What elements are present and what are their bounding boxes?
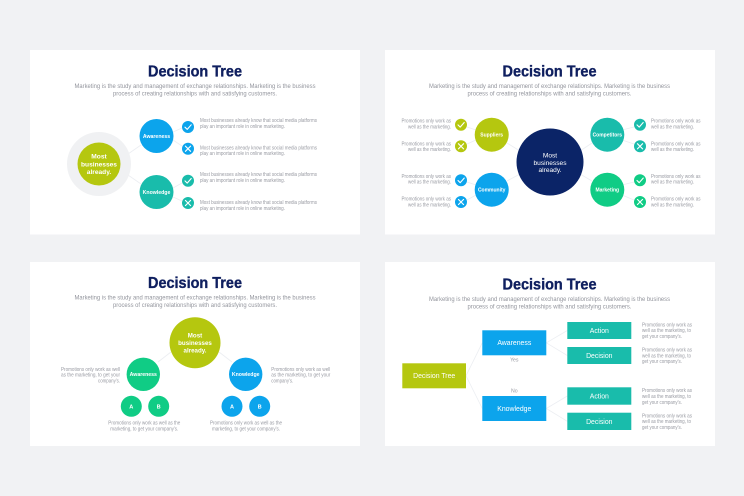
root node: most businesses already: businesses (534, 160, 567, 167)
node: suppliers (475, 118, 509, 152)
box: action 1: Action (590, 328, 609, 335)
left option text 3 (402, 174, 451, 186)
left option text 1: well as the marketing. (408, 124, 451, 130)
panel: circle tree with check and cross options (30, 50, 360, 234)
root node: most businesses already: businesses (81, 162, 117, 168)
bottom right description: Promotions only work as well as the (210, 421, 282, 427)
root node: most businesses already: Most (91, 154, 107, 160)
node: competitors: Competitors (593, 132, 622, 138)
decision 1 description (642, 348, 692, 365)
left description: company's. (98, 378, 120, 384)
icon: blue cross (182, 143, 194, 155)
node: knowledge: Knowledge (143, 190, 170, 196)
decision 2 description: get your company's. (642, 425, 682, 431)
right description: company's. (271, 378, 293, 384)
node: awareness A: A (129, 404, 133, 410)
node: community: Community (478, 188, 506, 194)
node: community (475, 173, 509, 207)
root node: most businesses already (67, 132, 131, 196)
box: action 1 (567, 322, 631, 339)
option text 3: Most businesses already know that social media platforms (200, 172, 317, 178)
decision 2 description (642, 413, 692, 431)
right option text 1 (651, 119, 701, 130)
panel: rectangular decision tree (385, 262, 715, 446)
decision 1 description: Promotions only work as (642, 348, 692, 354)
box: decision 1 (567, 347, 631, 364)
left option text 4: well as the marketing. (408, 202, 451, 208)
node: awareness A (121, 396, 142, 417)
intro text (74, 295, 316, 309)
icon: blue check (455, 174, 467, 186)
right option text 4 (651, 197, 701, 208)
right option text 2: Promotions only work as (651, 141, 701, 147)
icon: teal check (634, 119, 646, 131)
node: knowledge: Knowledge (232, 372, 260, 378)
option text 2: play an important role in online marketing. (200, 151, 285, 157)
option text 3 (200, 172, 317, 184)
root node: most businesses already: already. (87, 169, 111, 176)
node: knowledge (140, 175, 174, 209)
option text 1: play an important role in online marketing. (200, 124, 285, 130)
right option text 2 (651, 141, 701, 153)
root node: most businesses already: Most (543, 152, 557, 160)
right description: as the marketing, to get your (271, 373, 331, 379)
action 2 description: get your company's. (642, 400, 682, 406)
left description: as the marketing, to get your (61, 373, 120, 379)
intro text: Marketing is the study and management of exchange relationships. Marketing is the business (74, 295, 316, 302)
decision 1 description: get your company's. (642, 359, 682, 365)
option text 4: Most businesses already know that social media platforms (200, 200, 317, 206)
intro text: Marketing is the study and management of exchange relationships. Marketing is the business (429, 83, 671, 90)
decision 1 description: well as the marketing, to (642, 353, 691, 359)
node: awareness B: B (157, 404, 161, 410)
intro text (429, 296, 671, 311)
root node: most businesses already (516, 128, 584, 196)
icon: teal cross (634, 140, 646, 152)
root node: most businesses already: Most (188, 332, 202, 340)
intro text: process of creating relationships with and satisfying customers. (468, 90, 632, 98)
left option text 3: Promotions only work as (402, 174, 451, 180)
left option text 3: well as the marketing. (408, 180, 451, 186)
decision 2 description: Promotions only work as (642, 413, 692, 419)
box: awareness: Awareness (497, 340, 532, 347)
box: decision 2: Decision (586, 419, 613, 426)
box: decision 2 (567, 413, 631, 430)
node: awareness B (148, 396, 169, 417)
right option text 4: well as the marketing. (651, 202, 694, 208)
right option text 3: well as the marketing. (651, 180, 694, 186)
bottom left description (108, 421, 180, 433)
right option text 3 (651, 174, 701, 186)
icon: lime check (455, 119, 467, 131)
root node: most businesses already (170, 317, 220, 368)
panel: top-down circle tree (30, 262, 360, 446)
icon: teal cross (182, 197, 194, 209)
root node: most businesses already: already. (184, 348, 207, 354)
bottom left description: marketing, to get your company's. (110, 427, 178, 433)
decision 2 description: well as the marketing, to (642, 419, 691, 425)
title: Decision Tree (502, 64, 597, 80)
option text 2 (200, 145, 317, 157)
intro text: Marketing is the study and management of exchange relationships. Marketing is the business (74, 83, 316, 90)
node: knowledge A: A (230, 404, 234, 410)
intro text: process of creating relationships with and satisfying customers. (113, 90, 277, 98)
box: decision 1: Decision (586, 353, 613, 360)
panel: central circle with four branches (385, 50, 715, 234)
icon: green cross (634, 196, 646, 208)
intro text: Marketing is the study and management of exchange relationships. Marketing is the business (429, 296, 671, 303)
box: decision tree: Decision Tree (413, 373, 455, 380)
left option text 4: Promotions only work as (402, 197, 451, 203)
option text 2: Most businesses already know that social media platforms (200, 145, 317, 151)
title: Decision Tree (502, 276, 597, 294)
intro text (429, 83, 671, 98)
action 2 description: Promotions only work as (642, 388, 692, 394)
left option text 1: Promotions only work as (402, 119, 451, 125)
left option text 1 (402, 119, 451, 130)
right option text 2: well as the marketing. (651, 147, 694, 153)
left option text 2: Promotions only work as (402, 141, 451, 147)
node: knowledge A (222, 396, 242, 417)
left option text 4 (402, 197, 451, 208)
left description (61, 367, 120, 384)
node: knowledge B (249, 396, 270, 417)
node: suppliers: Suppliers (480, 132, 503, 138)
right option text 4: Promotions only work as (651, 197, 701, 203)
right description (271, 367, 331, 384)
node: marketing: Marketing (595, 188, 619, 194)
action 1 description: well as the marketing, to (642, 328, 691, 334)
action 1 description: get your company's. (642, 334, 682, 340)
box: knowledge (482, 396, 546, 421)
node: awareness (127, 358, 160, 391)
node: marketing (590, 173, 624, 207)
box: decision tree (402, 363, 466, 388)
intro text: process of creating relationships with and satisfying customers. (468, 304, 632, 311)
option text 1 (200, 118, 317, 130)
icon: green check (634, 174, 646, 186)
label: no: No (511, 389, 518, 395)
box: action 2 (567, 387, 631, 405)
bottom right description: marketing, to get your company's. (212, 427, 280, 433)
bottom left description: Promotions only work as well as the (108, 421, 180, 427)
option text 4 (200, 200, 317, 212)
box: action 2: Action (590, 393, 609, 400)
left option text 2 (402, 141, 451, 153)
root node: most businesses already: businesses (178, 340, 212, 347)
action 1 description: Promotions only work as (642, 322, 692, 328)
right option text 3: Promotions only work as (651, 174, 701, 180)
node: competitors (590, 118, 624, 152)
icon: lime cross (455, 140, 467, 152)
left description: Promotions only work as well (61, 367, 120, 373)
action 2 description: well as the marketing, to (642, 394, 691, 400)
box: knowledge: Knowledge (497, 406, 532, 413)
box: awareness (482, 330, 546, 355)
right option text 1: well as the marketing. (651, 124, 694, 130)
node: knowledge (229, 358, 262, 391)
node: awareness (140, 119, 174, 153)
option text 3: play an important role in online marketing. (200, 178, 285, 184)
action 2 description (642, 388, 692, 406)
bottom right description (210, 421, 282, 433)
left option text 2: well as the marketing. (408, 147, 451, 153)
intro text (74, 83, 316, 98)
option text 1: Most businesses already know that social media platforms (200, 118, 317, 124)
node: knowledge B: B (258, 404, 262, 410)
root node: most businesses already: already. (539, 167, 562, 174)
title: Decision Tree (148, 275, 242, 292)
node: awareness: Awareness (143, 134, 170, 140)
intro text: process of creating relationships with and satisfying customers. (113, 302, 277, 309)
option text 4: play an important role in online marketing. (200, 206, 285, 212)
icon: blue check (182, 121, 194, 133)
title: Decision Tree (148, 64, 242, 80)
right option text 1: Promotions only work as (651, 119, 701, 125)
node: awareness: Awareness (130, 372, 157, 378)
icon: teal check (182, 175, 194, 187)
right description: Promotions only work as well (271, 367, 330, 373)
label: yes: Yes (510, 358, 519, 364)
action 1 description (642, 322, 692, 340)
icon: blue cross (455, 196, 467, 208)
